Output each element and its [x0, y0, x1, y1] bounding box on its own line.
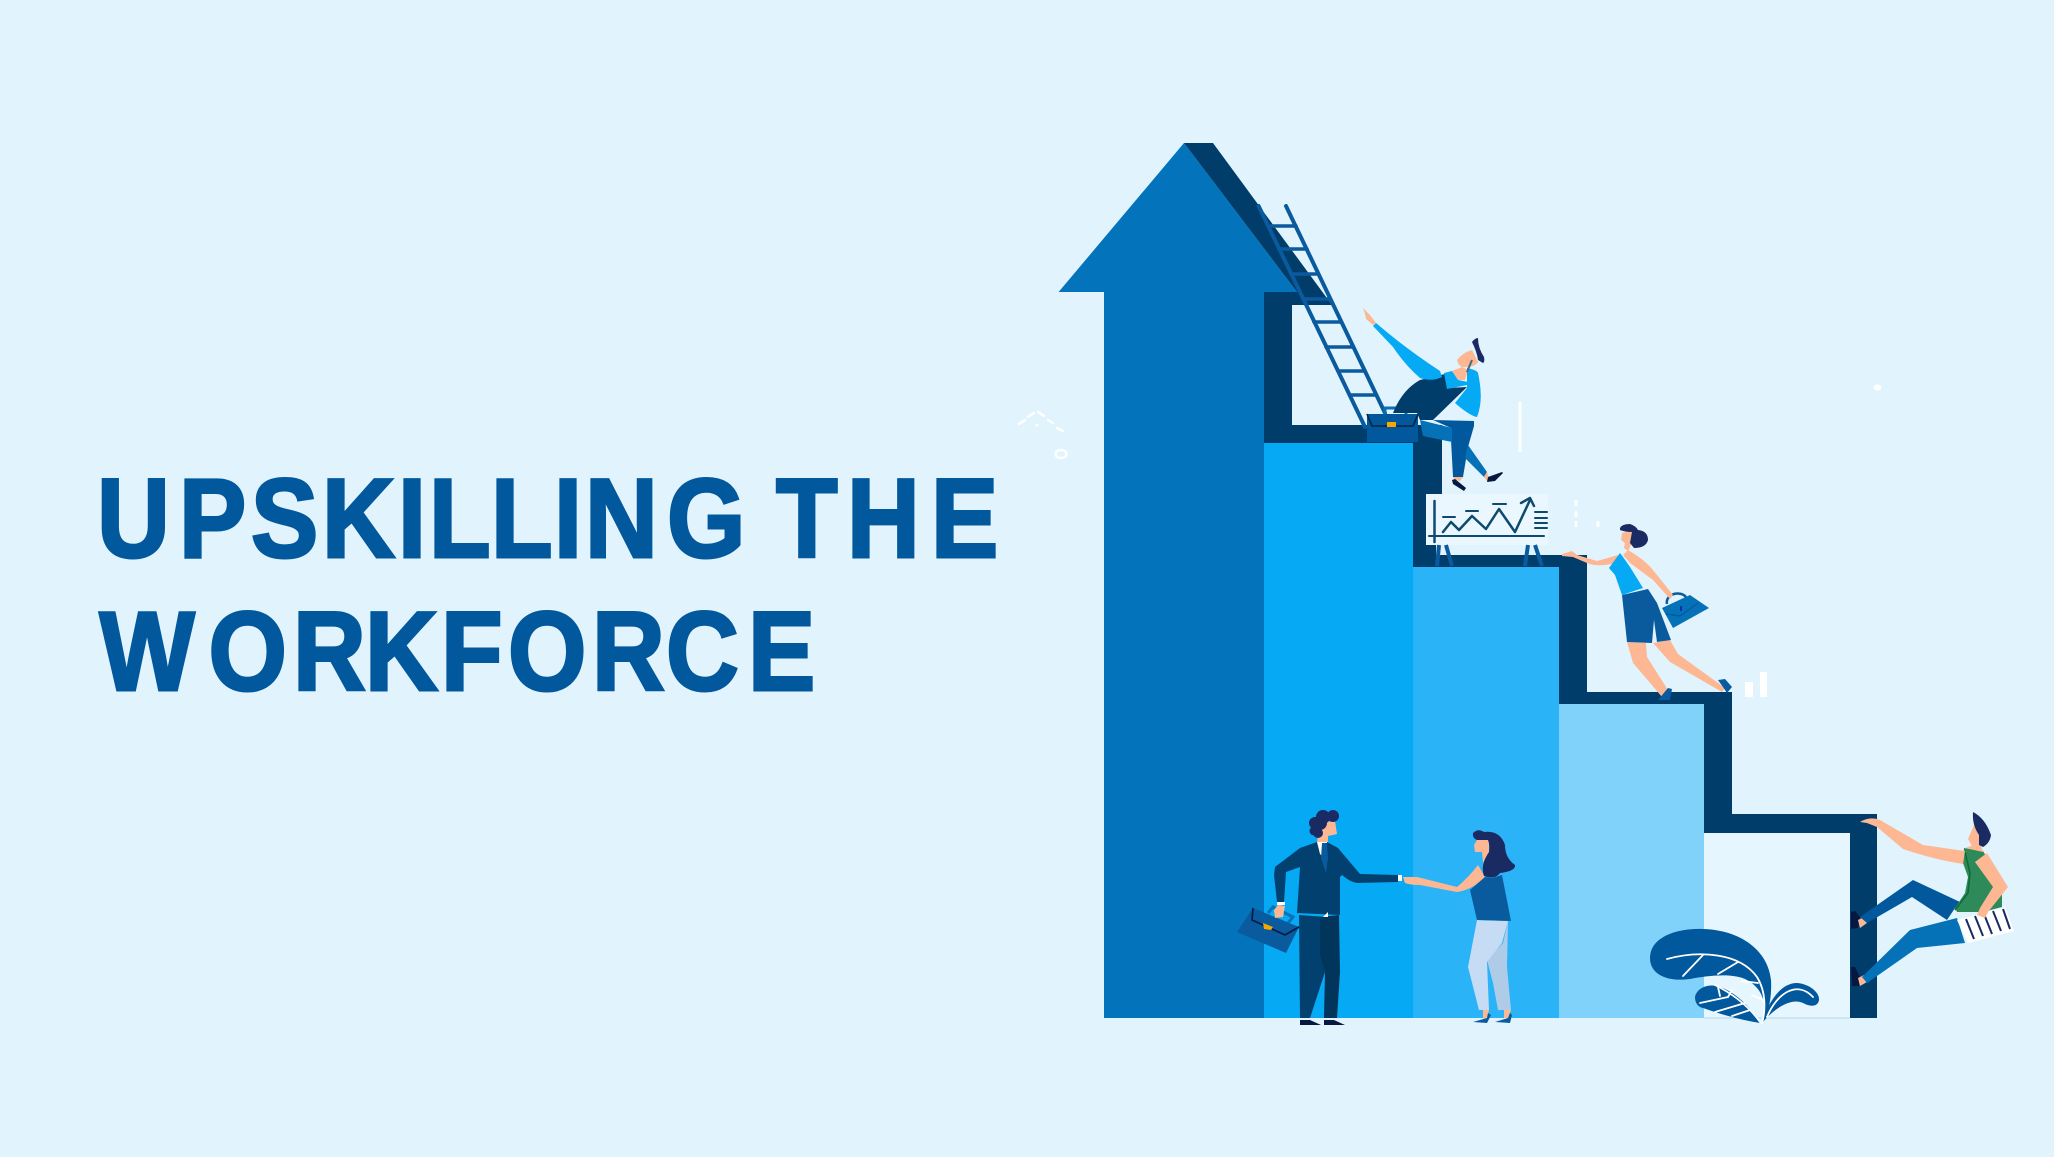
ground line [1704, 1018, 1850, 1019]
figure: man seated pointing up [1363, 308, 1503, 491]
ladder [1259, 206, 1385, 427]
title: WORKFORCE [100, 589, 815, 714]
title [97, 456, 998, 714]
icon: briefcase on the top step [1367, 408, 1418, 442]
column three [1559, 704, 1704, 1018]
pale fourth column [1704, 830, 1854, 1018]
white decorative marks [1019, 384, 1882, 697]
figure: man climbing the last step [1851, 812, 2014, 986]
column two [1413, 567, 1559, 1018]
column one [1264, 443, 1413, 1018]
title: UPSKILLING THE [97, 456, 998, 581]
figure: woman shaking hands [1403, 830, 1515, 1023]
line chart board [1426, 494, 1548, 566]
staircase arrow chart [1059, 143, 1877, 1018]
figure: man in suit shaking hands [1237, 810, 1402, 1025]
icon: decorative plant [1650, 929, 1819, 1023]
arrow dark edge and stair frame [1184, 143, 1877, 1018]
figure: woman climbing with handbag [1562, 524, 1732, 700]
arrow body [1059, 143, 1297, 1018]
